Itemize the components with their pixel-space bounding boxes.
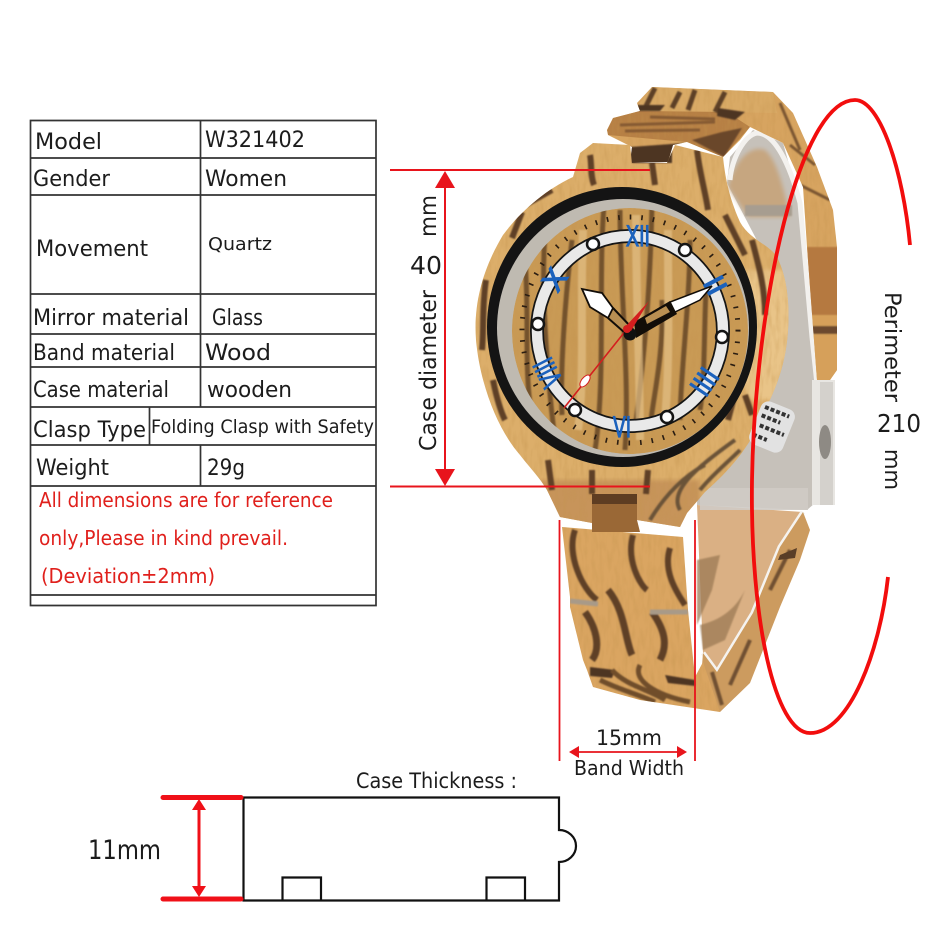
blue roman numerals: VIII: [527, 352, 569, 392]
case thickness heading: Case Thickness :: [356, 769, 517, 793]
case connector link: [592, 490, 640, 532]
blue roman numerals: [527, 220, 733, 444]
band interior and clasp: [697, 130, 835, 672]
row: gender: [33, 167, 287, 192]
case side profile: [244, 798, 576, 900]
row: model: [35, 128, 305, 155]
row: band material: Wood: [205, 341, 271, 366]
band width label: Band Width: [574, 756, 684, 780]
perimeter label: 210: [877, 409, 921, 438]
blue roman numerals: II: [696, 271, 733, 301]
case diameter label: [410, 195, 442, 451]
row: case material: [33, 378, 292, 403]
row: mirror material: Glass: [212, 306, 263, 331]
perimeter label: [877, 292, 921, 490]
red disclaimer note: (Deviation±2mm): [41, 564, 215, 588]
minute tick ring: [522, 217, 738, 443]
hour hand: [582, 289, 632, 333]
row: weight: [36, 456, 245, 481]
case diameter label: mm: [416, 195, 442, 237]
red disclaimer note: [39, 488, 333, 588]
blue roman numerals: X: [536, 262, 575, 297]
panel: specification table: [30, 120, 376, 606]
row: weight: Weight: [36, 456, 109, 481]
band width label: [574, 726, 684, 780]
red disclaimer note: All dimensions are for reference: [39, 488, 333, 512]
thickness value: 11mm: [88, 835, 161, 866]
band width label: 15mm: [596, 726, 662, 750]
blue roman numerals: XII: [626, 220, 650, 253]
row: gender: Women: [205, 167, 287, 192]
case diameter label: Case diameter: [416, 289, 442, 451]
silver inner bevel: [497, 199, 749, 457]
watch photo illustration: [470, 80, 845, 715]
row: movement: Movement: [36, 237, 148, 262]
row: clasp type: Clasp Type: [33, 418, 146, 443]
hour markers dots: [532, 238, 728, 423]
perimeter label: mm: [879, 449, 904, 490]
row: clasp type: Folding Clasp with Safety: [151, 416, 374, 438]
case diameter dimension: [390, 170, 650, 486]
blue roman numerals: IIII: [683, 361, 725, 401]
row: model: Model: [35, 130, 102, 155]
black bezel ring: [487, 187, 757, 467]
row: gender: Gender: [33, 167, 111, 192]
row: case material: Case material: [33, 378, 169, 403]
row: band material: Band material: [33, 341, 175, 366]
row: movement: Quartz: [208, 234, 272, 255]
row: weight: 29g: [207, 456, 245, 481]
red disclaimer note: only,Please in kind prevail.: [39, 526, 288, 550]
wooden dial: [510, 205, 750, 457]
minute hand: [634, 286, 712, 338]
band width dimension: [560, 520, 695, 761]
white hour track: [537, 236, 723, 426]
wooden case: [470, 140, 800, 535]
lower band links: [555, 512, 810, 715]
row: movement: [36, 234, 272, 262]
row: model: W321402: [205, 128, 305, 153]
case diameter label: 40: [410, 251, 442, 280]
red second hand: [564, 301, 649, 408]
upper band links: [607, 87, 837, 380]
perimeter curve: [752, 100, 910, 733]
perimeter label: Perimeter: [879, 292, 904, 403]
thickness dimension arrow: [163, 798, 241, 899]
crown: [747, 399, 797, 455]
row: band material: [33, 341, 271, 366]
row: clasp type: [33, 416, 374, 443]
blue roman numerals: VI: [613, 411, 631, 444]
row: mirror material: Mirror material: [33, 306, 189, 331]
row: case material: wooden: [207, 378, 292, 403]
